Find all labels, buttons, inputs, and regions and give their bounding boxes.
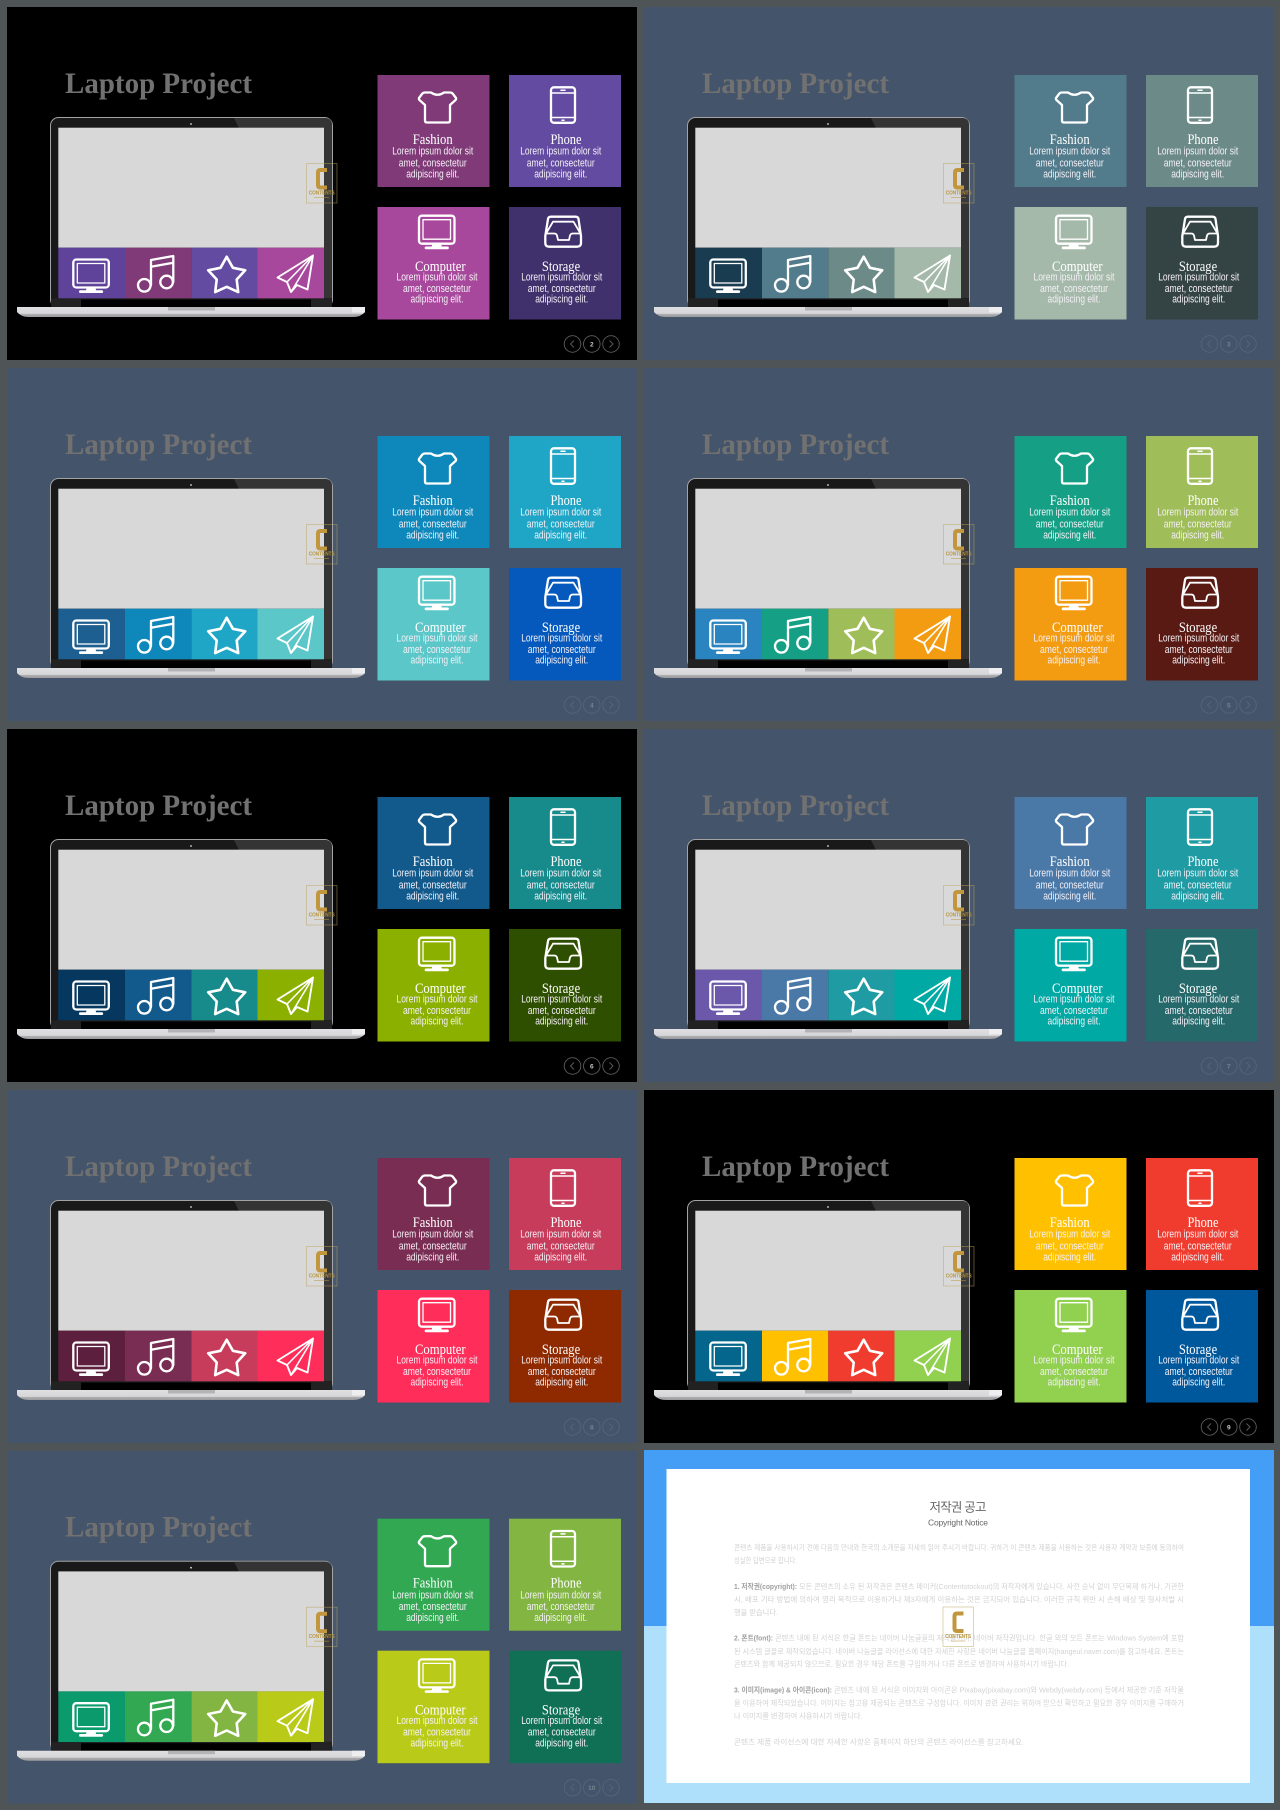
- card: computer: Lorem ipsum dolor sit: [396, 1715, 478, 1727]
- card: phone: Phone: [550, 132, 582, 148]
- card: phone: Lorem ipsum dolor sit: [1157, 146, 1238, 158]
- card: phone: Lorem ipsum dolor sit: [1157, 1229, 1238, 1241]
- intro paragraph: 콘텐츠 제품을 사용하시기 전에 다음의 안내와 한국의 소개문을 자세히 읽어 주시기 바랍니다. 귀하가 이 콘텐츠 제품을 사용하는 것은 사용자 계약과 보증에 동의하여: [734, 1542, 1184, 1552]
- card: computer: [1014, 929, 1126, 1042]
- card: fashion: adipiscing elit.: [406, 1612, 459, 1624]
- title: Laptop Project: [702, 428, 889, 461]
- card: storage: Lorem ipsum dolor sit: [521, 994, 602, 1006]
- watermark: CONTENTS: [946, 190, 972, 196]
- card: computer: Lorem ipsum dolor sit: [1034, 632, 1114, 644]
- watermark: CONTENTS: [946, 912, 972, 918]
- slide background: [644, 7, 1274, 360]
- card: phone: Phone: [1188, 493, 1219, 509]
- slide background: [644, 1090, 1274, 1443]
- card: computer: adipiscing elit.: [1048, 294, 1100, 306]
- card: fashion: adipiscing elit.: [406, 168, 459, 180]
- card: phone: [1146, 436, 1258, 548]
- page navigation: [564, 1779, 619, 1796]
- card: fashion: adipiscing elit.: [406, 529, 459, 541]
- card: storage: [1146, 568, 1258, 680]
- page navigation: [564, 697, 619, 713]
- card: fashion: amet, consectetur: [399, 1601, 467, 1613]
- card: phone: adipiscing elit.: [534, 1612, 587, 1624]
- watermark: CONTENTS: [945, 1634, 972, 1640]
- card: computer: adipiscing elit.: [410, 1377, 464, 1389]
- card: phone: amet, consectetur: [527, 879, 595, 891]
- card: fashion: Lorem ipsum dolor sit: [392, 868, 473, 880]
- title: Laptop Project: [65, 428, 252, 461]
- card: fashion: [378, 797, 490, 909]
- watermark: [944, 886, 974, 925]
- card: phone: adipiscing elit.: [534, 529, 587, 541]
- card: computer: Computer: [415, 259, 466, 275]
- card: storage: Lorem ipsum dolor sit: [521, 632, 602, 644]
- page navigation: [564, 1419, 619, 1435]
- laptop illustration: [17, 840, 365, 1039]
- card: fashion: amet, consectetur: [399, 157, 467, 169]
- intro paragraph: [734, 1542, 1184, 1565]
- card: storage: amet, consectetur: [528, 1727, 596, 1739]
- card: fashion: Fashion: [1050, 493, 1090, 509]
- intro paragraph: 성실한 답변으로 합니다.: [734, 1555, 797, 1565]
- page navigation: [1201, 336, 1256, 352]
- notice heading: 저작권 공고: [930, 1500, 986, 1514]
- card: computer: Lorem ipsum dolor sit: [396, 994, 478, 1006]
- card: phone: amet, consectetur: [1164, 1240, 1232, 1252]
- slide 9: yellow, red, green and blue on black: [644, 1090, 1274, 1443]
- card: computer: Lorem ipsum dolor sit: [396, 272, 478, 284]
- paragraph 3: image and icon: 을 이용하여 제작되었습니다. 이미지는 참고용 제공되는 콘텐츠로 구성합니다. 이미지 관련 권리는 위하여 받으신 확인하고 필요한 경우 이미지를 구매하거: [734, 1698, 1184, 1708]
- card: phone: amet, consectetur: [527, 518, 595, 530]
- page navigation: 8: [590, 1424, 594, 1431]
- card: fashion: Fashion: [413, 493, 453, 509]
- card: phone: Lorem ipsum dolor sit: [520, 868, 601, 880]
- watermark: [306, 524, 337, 564]
- card: storage: adipiscing elit.: [535, 294, 588, 306]
- card: computer: amet, consectetur: [403, 644, 471, 656]
- watermark: CONTENTS: [946, 1274, 972, 1280]
- card: computer: adipiscing elit.: [410, 294, 464, 306]
- card: fashion: Lorem ipsum dolor sit: [1029, 868, 1110, 880]
- card: storage: adipiscing elit.: [1172, 655, 1225, 667]
- laptop illustration: [654, 1200, 1002, 1400]
- laptop illustration: [17, 1200, 365, 1400]
- card: storage: adipiscing elit.: [1172, 1016, 1225, 1028]
- watermark: [306, 1607, 337, 1647]
- watermark: CONTENTS: [309, 552, 335, 558]
- card: phone: amet, consectetur: [527, 1601, 595, 1613]
- card: computer: Computer: [1052, 259, 1103, 275]
- card: phone: amet, consectetur: [527, 157, 595, 169]
- card: computer: Lorem ipsum dolor sit: [1034, 1354, 1114, 1366]
- card: computer: Computer: [415, 1703, 466, 1719]
- card: storage: Storage: [1179, 1342, 1217, 1358]
- card: computer: [378, 1651, 490, 1763]
- card: computer: Computer: [1052, 1342, 1103, 1358]
- card: computer: amet, consectetur: [1040, 283, 1108, 295]
- card: phone: amet, consectetur: [1164, 879, 1232, 891]
- watermark: [944, 524, 974, 564]
- card: storage: Lorem ipsum dolor sit: [521, 272, 602, 284]
- slide 3: teal grey on slate: [644, 7, 1274, 360]
- card: phone: Lorem ipsum dolor sit: [520, 1589, 601, 1601]
- card: computer: adipiscing elit.: [1048, 1016, 1100, 1028]
- page navigation: 7: [1227, 1063, 1231, 1070]
- card: computer: Lorem ipsum dolor sit: [396, 1354, 478, 1366]
- card: phone: [509, 1519, 621, 1631]
- card: storage: Lorem ipsum dolor sit: [521, 1715, 602, 1727]
- laptop icon strip: [695, 1331, 961, 1381]
- card: storage: amet, consectetur: [1165, 1366, 1233, 1378]
- card: computer: [378, 568, 490, 680]
- card: fashion: Fashion: [413, 854, 453, 870]
- watermark: [306, 886, 337, 925]
- card: fashion: Fashion: [1050, 854, 1090, 870]
- page navigation: 3: [1227, 341, 1231, 348]
- laptop illustration: [17, 478, 365, 678]
- card: fashion: [378, 1158, 490, 1270]
- slide 4: blue and cyan on slate: [7, 368, 637, 721]
- card: storage: amet, consectetur: [528, 1005, 596, 1017]
- slide 10: greens on slate: [7, 1451, 637, 1804]
- card: fashion: amet, consectetur: [399, 879, 467, 891]
- card: storage: Lorem ipsum dolor sit: [1158, 632, 1239, 644]
- card: fashion: [1014, 797, 1126, 909]
- laptop icon strip: [695, 609, 961, 659]
- card: phone: [1146, 75, 1258, 187]
- paragraph 2: font: 된 시스템 글꼴로 제작되었습니다. 네이버 나눔글꼴 라이선스에 대한 자세한 사항은 네이버 나눔글꼴 홈페이지(hangeul.naver.com)를 참고하세요. 폰트는: [734, 1646, 1184, 1656]
- card: phone: adipiscing elit.: [1171, 529, 1224, 541]
- card: phone: adipiscing elit.: [534, 1251, 587, 1263]
- slide background: [7, 729, 637, 1082]
- card: phone: Phone: [550, 1576, 582, 1592]
- card: phone: Phone: [1188, 854, 1219, 870]
- card: phone: amet, consectetur: [1164, 518, 1232, 530]
- paragraph 2: font: 콘텐츠 내에 된 서식은 한글 폰트는 네이버 나눔글꼴의 저작물이며, 네이버 저작권입니다. 한글 외의 모든 폰트는 Windows System에 포함: [775, 1632, 1184, 1642]
- card: phone: [1146, 797, 1258, 909]
- card: computer: Computer: [1052, 981, 1103, 997]
- title: Laptop Project: [702, 789, 889, 822]
- paragraph 2: font: [734, 1632, 1184, 1668]
- notice subheading: Copyright Notice: [928, 1518, 988, 1528]
- card: storage: amet, consectetur: [528, 644, 596, 656]
- laptop illustration: [17, 118, 365, 317]
- card: computer: amet, consectetur: [1040, 1005, 1108, 1017]
- card: computer: [378, 929, 490, 1042]
- card: storage: Storage: [542, 1342, 580, 1358]
- laptop illustration: [17, 1561, 365, 1761]
- slide background: [7, 7, 637, 360]
- watermark: [944, 1246, 974, 1286]
- laptop icon strip: [58, 1331, 324, 1381]
- paragraph 3: image and icon: 나 이미지를 변경하여 사용하시기 바랍니다.: [734, 1710, 862, 1720]
- paragraph 1: copyright: 1. 저작권(copyright):: [734, 1581, 797, 1591]
- card: phone: adipiscing elit.: [534, 890, 587, 902]
- card: storage: Lorem ipsum dolor sit: [1158, 272, 1239, 284]
- card: computer: Lorem ipsum dolor sit: [396, 632, 478, 644]
- card: fashion: amet, consectetur: [1036, 879, 1104, 891]
- title: Laptop Project: [65, 789, 252, 822]
- card: phone: [509, 1158, 621, 1270]
- card: computer: Computer: [415, 620, 466, 636]
- card: phone: amet, consectetur: [1164, 157, 1232, 169]
- card: storage: [509, 1290, 621, 1402]
- card: fashion: amet, consectetur: [1036, 157, 1104, 169]
- title: Laptop Project: [65, 67, 252, 100]
- card: storage: adipiscing elit.: [1172, 294, 1225, 306]
- card: storage: Lorem ipsum dolor sit: [521, 1354, 602, 1366]
- card: computer: [1014, 207, 1126, 320]
- card: storage: Storage: [1179, 259, 1217, 275]
- card: phone: Phone: [550, 1215, 582, 1231]
- card: phone: [1146, 1158, 1258, 1270]
- card: computer: Lorem ipsum dolor sit: [1034, 272, 1114, 284]
- card: fashion: amet, consectetur: [1036, 518, 1104, 530]
- card: computer: Computer: [415, 981, 466, 997]
- slide 8: crimson on slate: [7, 1090, 637, 1443]
- card: fashion: adipiscing elit.: [1043, 1251, 1096, 1263]
- slide background: [7, 1451, 637, 1804]
- card: phone: Lorem ipsum dolor sit: [1157, 868, 1238, 880]
- card: computer: amet, consectetur: [403, 1727, 471, 1739]
- card: computer: amet, consectetur: [403, 1005, 471, 1017]
- paragraph 1: copyright: 시, 배포 기타 방법에 의하여 영리 목적으로 이용하거나 제3자에게 이용하는 것은 금지되어 있습니다. 이러한 규칙 위반 시 손해 배상 및 형사처벌 시: [734, 1594, 1184, 1604]
- page navigation: [1201, 1419, 1256, 1435]
- card: fashion: [1014, 75, 1126, 187]
- card: fashion: [378, 436, 490, 548]
- card: storage: Storage: [1179, 981, 1217, 997]
- card: fashion: Fashion: [1050, 1215, 1090, 1231]
- paragraph 1: copyright: 행을 받습니다.: [734, 1607, 778, 1617]
- paragraph 2: font: 콘텐츠와 함께 제공되지 않으므로, 필요한 경우 해당 폰트를 구입하거나 다른 폰트로 변경하여 사용하시기 바랍니다.: [734, 1658, 1069, 1668]
- card: phone: Phone: [550, 493, 582, 509]
- slide background: [644, 729, 1274, 1082]
- laptop icon strip: [695, 970, 961, 1020]
- card: computer: [1014, 1290, 1126, 1402]
- card: computer: [378, 1290, 490, 1402]
- card: computer: [378, 207, 490, 320]
- card: fashion: [378, 75, 490, 187]
- card: phone: Phone: [1188, 132, 1219, 148]
- page navigation: [564, 336, 619, 352]
- card: fashion: Fashion: [413, 1215, 453, 1231]
- watermark: [306, 164, 337, 203]
- card: fashion: amet, consectetur: [399, 1240, 467, 1252]
- card: phone: [509, 797, 621, 909]
- laptop icon strip: [58, 609, 324, 659]
- card: storage: [1146, 929, 1258, 1042]
- card: phone: Lorem ipsum dolor sit: [520, 146, 601, 158]
- card: phone: adipiscing elit.: [1171, 168, 1224, 180]
- card: fashion: Lorem ipsum dolor sit: [392, 146, 473, 158]
- card: storage: Lorem ipsum dolor sit: [1158, 1354, 1239, 1366]
- watermark: CONTENTS: [309, 912, 335, 918]
- slide 7: blue and teal on slate: [644, 729, 1274, 1082]
- page navigation: [1201, 697, 1256, 713]
- card: storage: adipiscing elit.: [535, 1737, 588, 1749]
- card: fashion: adipiscing elit.: [1043, 890, 1096, 902]
- card: storage: [509, 568, 621, 680]
- card: storage: Storage: [542, 259, 580, 275]
- card: fashion: Lorem ipsum dolor sit: [392, 1229, 473, 1241]
- card: computer: amet, consectetur: [1040, 644, 1108, 656]
- card: storage: [509, 1651, 621, 1763]
- laptop illustration: [654, 478, 1002, 678]
- paragraph 2: font: 2. 폰트(font):: [734, 1634, 773, 1642]
- card: phone: amet, consectetur: [527, 1240, 595, 1252]
- card: fashion: adipiscing elit.: [1043, 168, 1096, 180]
- card: storage: Storage: [1179, 620, 1217, 636]
- card: storage: adipiscing elit.: [535, 1377, 588, 1389]
- slide background: [7, 368, 637, 721]
- card: storage: Lorem ipsum dolor sit: [1158, 994, 1239, 1006]
- watermark: [306, 1246, 337, 1286]
- card: fashion: [1014, 436, 1126, 548]
- card: fashion: Fashion: [413, 1576, 453, 1592]
- page navigation: 10: [588, 1785, 596, 1792]
- card: fashion: Lorem ipsum dolor sit: [1029, 1229, 1110, 1241]
- page navigation: 9: [1227, 1424, 1231, 1431]
- card: phone: adipiscing elit.: [1171, 890, 1224, 902]
- white notice panel: [666, 1469, 1250, 1783]
- upper blue background: [644, 1450, 1274, 1626]
- card: storage: Storage: [542, 981, 580, 997]
- card: storage: Storage: [542, 1703, 580, 1719]
- card: fashion: amet, consectetur: [399, 518, 467, 530]
- page navigation: 6: [590, 1063, 594, 1070]
- closing line: 콘텐츠 제품 라이선스에 대한 자세한 사항은 홈페이지 하단의 콘텐츠 라이선스를 참고하세요.: [734, 1736, 1024, 1746]
- paragraph 1: copyright: [734, 1581, 1184, 1617]
- card: storage: [509, 207, 621, 320]
- page navigation: [564, 1058, 619, 1074]
- laptop icon strip: [58, 1691, 324, 1742]
- card: phone: adipiscing elit.: [534, 168, 587, 180]
- card: storage: [509, 929, 621, 1042]
- card: computer: adipiscing elit.: [1048, 1377, 1100, 1389]
- card: computer: amet, consectetur: [403, 1366, 471, 1378]
- card: phone: Phone: [1188, 1215, 1219, 1231]
- card: phone: Phone: [550, 854, 582, 870]
- card: storage: adipiscing elit.: [535, 1016, 588, 1028]
- lower light blue background: [644, 1626, 1274, 1803]
- watermark: CONTENTS: [946, 552, 972, 558]
- card: computer: adipiscing elit.: [410, 1737, 464, 1749]
- card: fashion: [1014, 1158, 1126, 1270]
- slide 2: purple on black: [7, 7, 637, 360]
- card: fashion: adipiscing elit.: [406, 1251, 459, 1263]
- watermark: CONTENTS: [309, 1634, 335, 1640]
- card: fashion: Lorem ipsum dolor sit: [1029, 146, 1110, 158]
- laptop icon strip: [695, 248, 961, 298]
- card: fashion: Fashion: [1050, 132, 1090, 148]
- card: computer: adipiscing elit.: [1048, 655, 1100, 667]
- card: storage: amet, consectetur: [528, 1366, 596, 1378]
- card: phone: adipiscing elit.: [1171, 1251, 1224, 1263]
- card: fashion: Lorem ipsum dolor sit: [392, 1589, 473, 1601]
- page navigation: 5: [1227, 702, 1231, 709]
- paragraph 1: copyright: 모든 콘텐츠의 소유 된 저작권은 콘텐츠 메이커(Contentstockout)의 저작자에게 있습니다. 사전 승낙 없이 무단복제 하거나, 기관한: [799, 1581, 1184, 1591]
- title: Laptop Project: [702, 67, 889, 100]
- slide background: [7, 1090, 637, 1443]
- card: phone: Lorem ipsum dolor sit: [520, 1229, 601, 1241]
- card: computer: adipiscing elit.: [410, 1016, 464, 1028]
- card: computer: Computer: [415, 1342, 466, 1358]
- slide 6: navy and olive on black: [7, 729, 637, 1082]
- card: storage: adipiscing elit.: [535, 655, 588, 667]
- page navigation: 4: [590, 702, 594, 709]
- card: computer: amet, consectetur: [1040, 1366, 1108, 1378]
- card: fashion: adipiscing elit.: [1043, 529, 1096, 541]
- watermark: [944, 164, 974, 203]
- paragraph 3: image and icon: [734, 1684, 1184, 1720]
- card: fashion: Lorem ipsum dolor sit: [392, 507, 473, 519]
- card: computer: Computer: [1052, 620, 1103, 636]
- card: fashion: Lorem ipsum dolor sit: [1029, 507, 1110, 519]
- card: computer: [1014, 568, 1126, 680]
- laptop illustration: [654, 840, 1002, 1039]
- paragraph 3: image and icon: 콘텐츠 내에 된 서식은 이미지와 아이콘은 Pixabay(pixabay.com)와 Webdy(webdy.com) 등에서 제공한 기준 저작물: [834, 1684, 1184, 1694]
- title: Laptop Project: [65, 1150, 252, 1183]
- page navigation: [1201, 1058, 1256, 1074]
- card: storage: amet, consectetur: [528, 283, 596, 295]
- watermark: [943, 1607, 974, 1646]
- slide 5: green, orange and brown on slate: [644, 368, 1274, 721]
- laptop icon strip: [58, 970, 324, 1020]
- card: fashion: [378, 1519, 490, 1631]
- card: storage: adipiscing elit.: [1172, 1377, 1225, 1389]
- watermark: CONTENTS: [309, 1274, 335, 1280]
- card: storage: amet, consectetur: [1165, 644, 1233, 656]
- card: computer: Lorem ipsum dolor sit: [1034, 994, 1114, 1006]
- card: computer: adipiscing elit.: [410, 655, 464, 667]
- card: storage: [1146, 1290, 1258, 1402]
- card: storage: amet, consectetur: [1165, 283, 1233, 295]
- title: Laptop Project: [702, 1150, 889, 1183]
- card: fashion: amet, consectetur: [1036, 1240, 1104, 1252]
- card: phone: [509, 436, 621, 548]
- card: fashion: Fashion: [413, 132, 453, 148]
- card: storage: [1146, 207, 1258, 320]
- laptop icon strip: [58, 248, 324, 298]
- card: computer: amet, consectetur: [403, 283, 471, 295]
- paragraph 3: image and icon: 3. 이미지(image) & 아이콘(icon):: [734, 1684, 832, 1694]
- card: fashion: adipiscing elit.: [406, 890, 459, 902]
- card: phone: [509, 75, 621, 187]
- laptop illustration: [654, 118, 1002, 317]
- card: storage: Storage: [542, 620, 580, 636]
- card: storage: amet, consectetur: [1165, 1005, 1233, 1017]
- copyright notice slide: [644, 1450, 1274, 1803]
- card: phone: Lorem ipsum dolor sit: [520, 507, 601, 519]
- watermark: CONTENTS: [309, 190, 335, 196]
- title: Laptop Project: [65, 1511, 252, 1544]
- page navigation: 2: [590, 341, 594, 348]
- slide background: [644, 368, 1274, 721]
- card: phone: Lorem ipsum dolor sit: [1157, 507, 1238, 519]
